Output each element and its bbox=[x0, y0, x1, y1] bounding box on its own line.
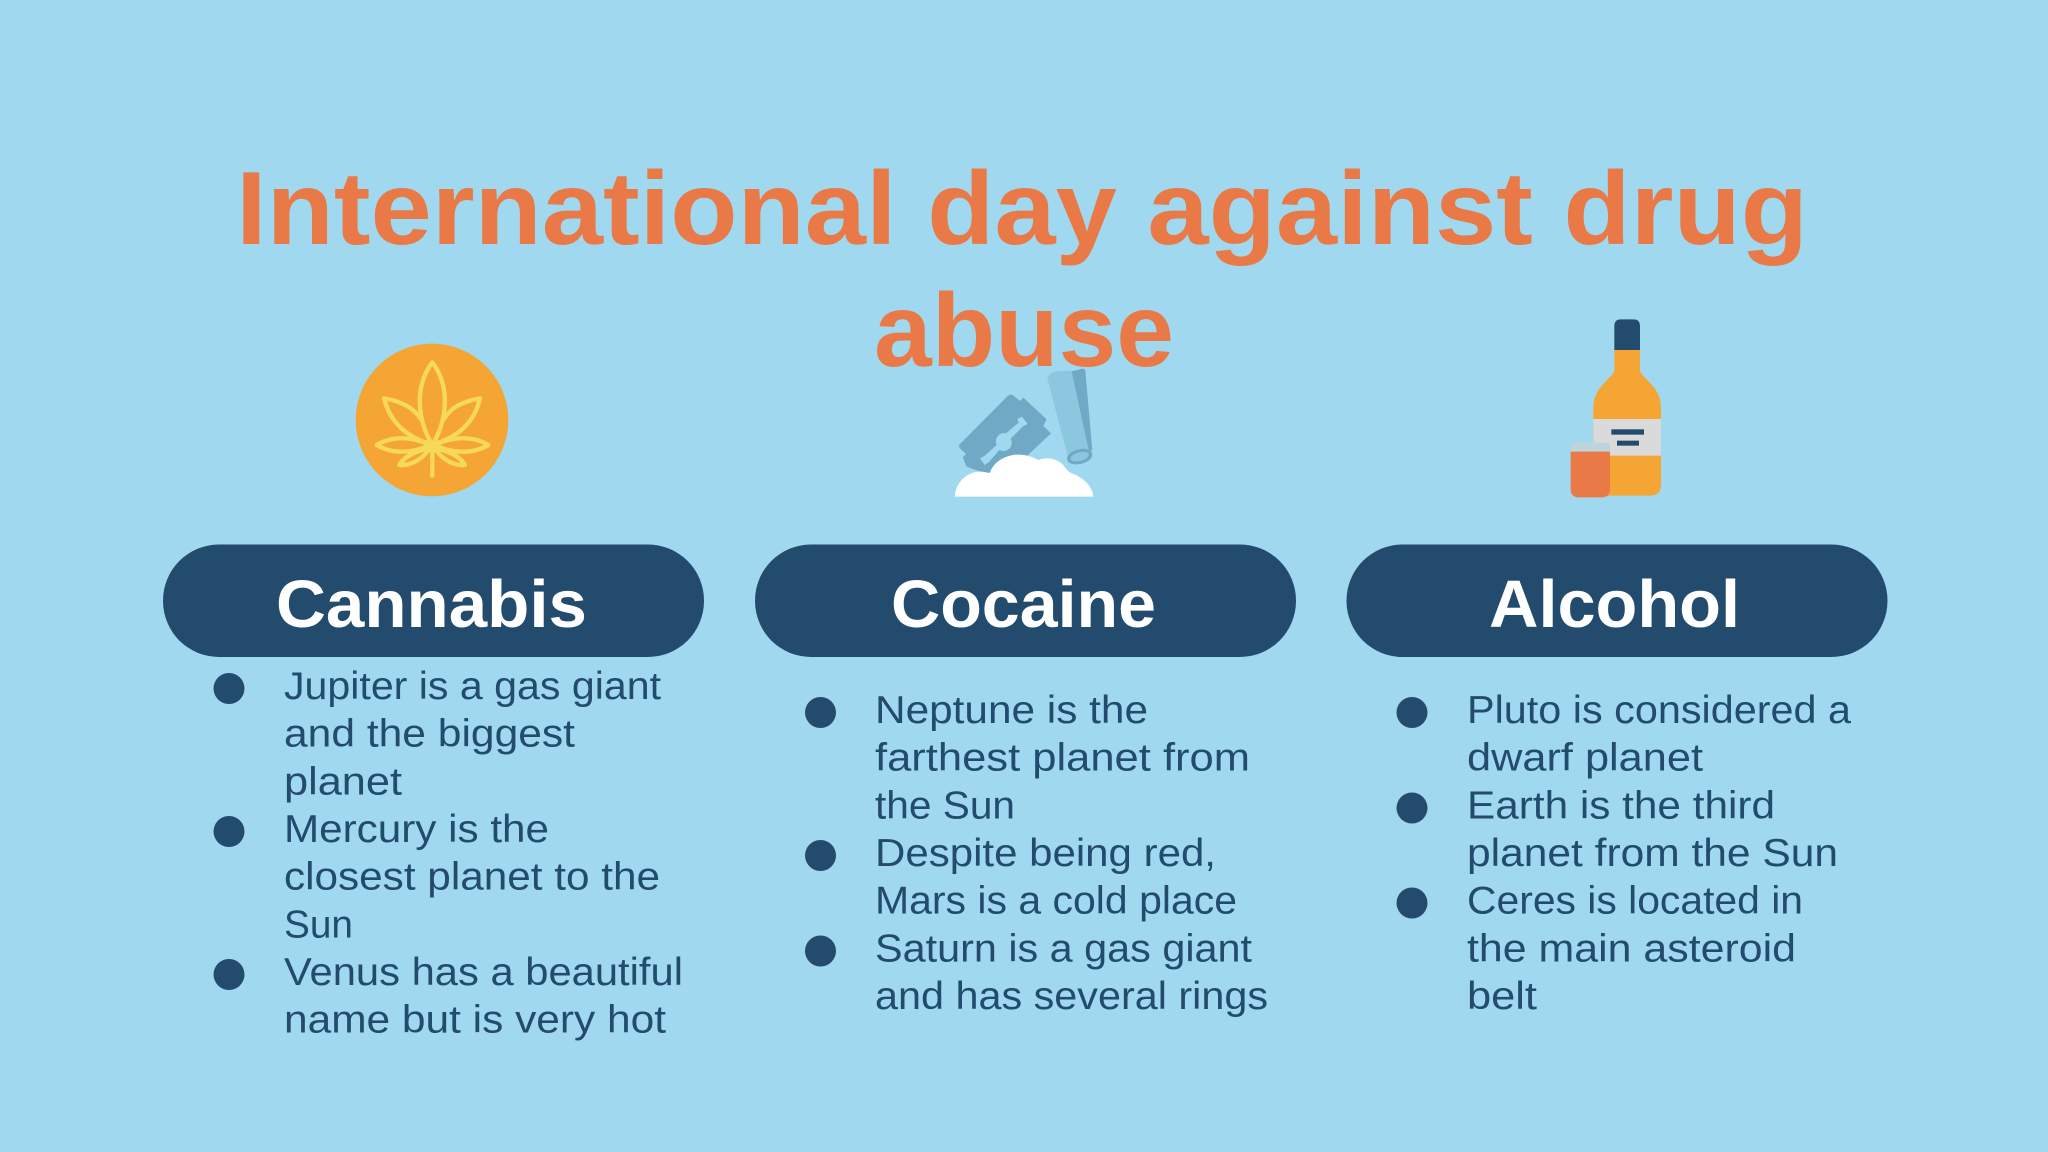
bullet list: cannabis: Sun bbox=[284, 903, 353, 946]
bullet list: cannabis: name but is very hot bbox=[284, 999, 666, 1042]
icon: cannabis leaf on orange circle bbox=[356, 344, 508, 496]
rolled tube bbox=[1047, 369, 1094, 467]
heading pill: cannabis: Cannabis bbox=[276, 567, 587, 642]
heading pill: cocaine: Cocaine bbox=[891, 567, 1156, 642]
bullet list: cannabis: Mercury is the bbox=[284, 808, 549, 851]
bullet list: alcohol: belt bbox=[1467, 975, 1537, 1018]
title: abuse bbox=[874, 273, 1174, 389]
bullet list: alcohol: Earth is the third bbox=[1467, 784, 1775, 827]
icon: alcohol bottle and glass bbox=[1571, 319, 1661, 497]
title: International day against drug bbox=[236, 151, 1808, 267]
heading pill: cocaine bbox=[755, 544, 1296, 657]
bullet list: alcohol: the main asteroid bbox=[1467, 927, 1796, 970]
bullet list: cannabis: Jupiter is a gas giant bbox=[284, 665, 661, 708]
bullet list: alcohol: planet from the Sun bbox=[1467, 832, 1838, 875]
bullet list: cannabis: Venus has a beautiful bbox=[284, 951, 683, 994]
bullet list: cocaine: Neptune is the bbox=[875, 689, 1148, 732]
bullet list: alcohol: dwarf planet bbox=[1467, 737, 1703, 780]
powder pile bbox=[955, 455, 1093, 497]
bullet list: cannabis: closest planet to the bbox=[284, 856, 660, 899]
panel: alcohol bbox=[1346, 544, 1888, 1018]
bullet list: cannabis: and the biggest bbox=[284, 713, 575, 756]
bullet list: cocaine: the Sun bbox=[875, 784, 1015, 827]
panel: cannabis bbox=[163, 544, 704, 1042]
panel: cocaine bbox=[755, 544, 1296, 1018]
bullet list: cocaine: and has several rings bbox=[875, 975, 1268, 1018]
heading pill: alcohol bbox=[1346, 544, 1888, 657]
bullet list: cannabis bbox=[214, 665, 683, 1042]
bullet list: cannabis: planet bbox=[284, 760, 402, 803]
title bbox=[236, 151, 1808, 389]
bullet list: alcohol: Ceres is located in bbox=[1467, 880, 1803, 923]
heading pill: cannabis bbox=[163, 544, 704, 657]
bullet list: cocaine bbox=[805, 689, 1268, 1018]
heading pill: alcohol: Alcohol bbox=[1489, 567, 1740, 642]
bullet list: cocaine: Mars is a cold place bbox=[875, 880, 1237, 923]
bullet list: cocaine: Saturn is a gas giant bbox=[875, 927, 1252, 970]
bullet list: cocaine: Despite being red, bbox=[875, 832, 1216, 875]
razor blade bbox=[959, 395, 1051, 475]
bullet list: alcohol bbox=[1396, 689, 1851, 1018]
bullet list: cocaine: farthest planet from bbox=[875, 737, 1250, 780]
icon: razor blade, rolled tube and powder bbox=[955, 369, 1094, 497]
bullet list: alcohol: Pluto is considered a bbox=[1467, 689, 1851, 732]
